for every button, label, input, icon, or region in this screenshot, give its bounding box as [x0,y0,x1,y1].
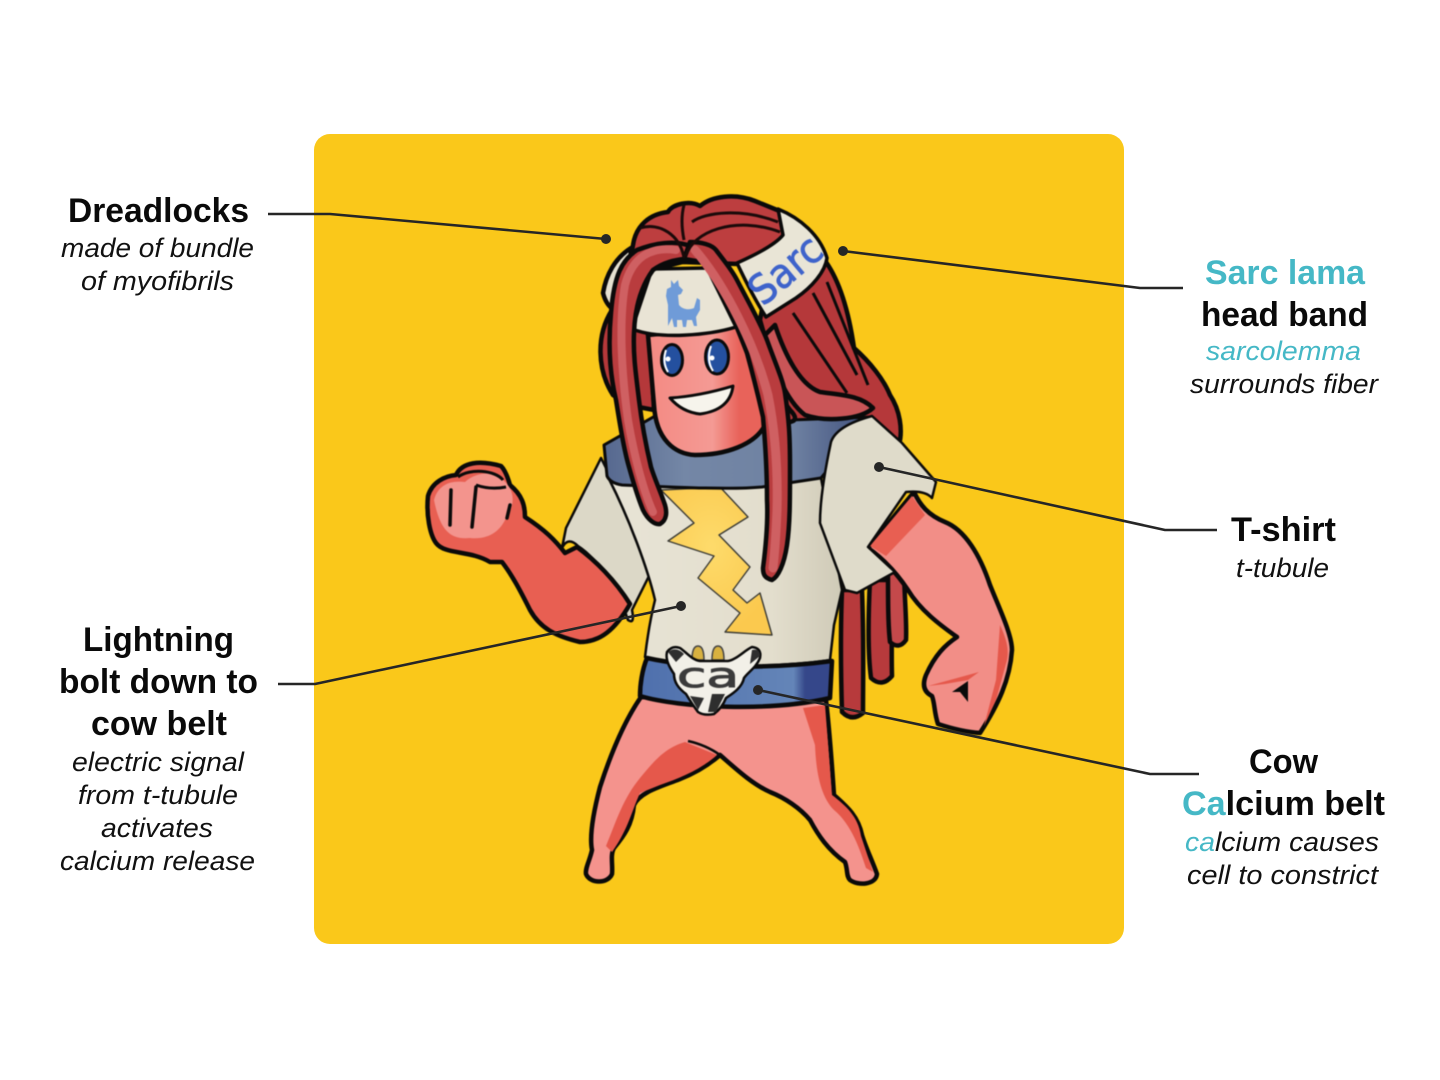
label: dreadlocks: made of bundle [61,233,254,263]
label: t-shirt [1231,511,1336,583]
headband right with Sarc: Sarc [739,225,832,315]
left eye [662,344,682,376]
face [648,325,765,455]
label: dreadlocks: of myofibrils [81,266,234,296]
label: lightning bolt: electric signal [72,747,245,777]
leg shadow right [803,705,873,872]
label: t-shirt: t-tubule [1236,553,1329,583]
llama icon [666,280,700,327]
leg crease [688,741,720,755]
back hair strands beside face [765,282,873,422]
right sleeve [820,416,936,593]
leg shadow left [606,742,717,852]
t-shirt torso [608,477,842,666]
hair top [630,196,786,270]
label: lightning bolt: calcium release [60,846,255,876]
label: sarc lama head band [1190,254,1379,399]
leader line: headband [838,246,1183,288]
leader line: lightning [278,601,686,684]
label: sarc lama head band: surrounds fiber [1190,369,1379,399]
cow head buckle [667,646,760,715]
leader line: dreadlocks [268,214,611,244]
fist highlight [434,474,513,538]
label: dreadlocks [61,192,254,296]
right arm and hand [868,492,1012,733]
label: sarc lama head band: sarcolemma [1206,336,1361,366]
label: lightning bolt: bolt down to [59,663,258,701]
label: lightning bolt: activates [101,813,213,843]
legs [586,697,877,884]
label: lightning bolt [59,621,258,876]
headband front with llama [632,268,736,335]
right eye [706,340,728,374]
buckle Ca letters: ca [677,656,739,696]
leader line: t-shirt [874,462,1217,530]
label: lightning bolt: cow belt [91,705,227,743]
lightning bolt [661,487,772,635]
back hair strands, lower right [841,565,906,717]
label: sarc lama head band: head band [1201,296,1368,334]
front left dreadlock [610,243,690,524]
label: cow calcium belt: Cow [1249,743,1319,781]
collar [604,416,872,488]
label: cow calcium belt [1182,743,1385,890]
headband left piece [603,248,631,310]
hair parting strands [640,205,780,258]
smile [670,386,733,414]
yellow panel [314,134,1124,944]
label: cow calcium belt: cell to constrict [1187,860,1380,890]
left arm and fist [427,463,630,642]
label: lightning bolt: Lightning [83,621,234,659]
label: cow calcium belt: calcium causes [1185,827,1379,857]
belt [640,658,832,707]
arm shadow [870,496,925,556]
label: sarc lama head band: Sarc lama [1205,254,1366,292]
front right dreadlock [684,242,790,580]
left side hair [600,310,654,410]
back hair mass [760,215,901,445]
label: lightning bolt: from t-tubule [78,780,238,810]
label: cow calcium belt: Calcium belt [1182,785,1385,823]
illustration: Sarc lama character [427,196,1012,884]
label: dreadlocks: Dreadlocks [68,192,249,230]
leader line: cow belt [753,685,1199,774]
t-shirt left sleeve [562,458,651,621]
label: t-shirt: T-shirt [1231,511,1336,549]
